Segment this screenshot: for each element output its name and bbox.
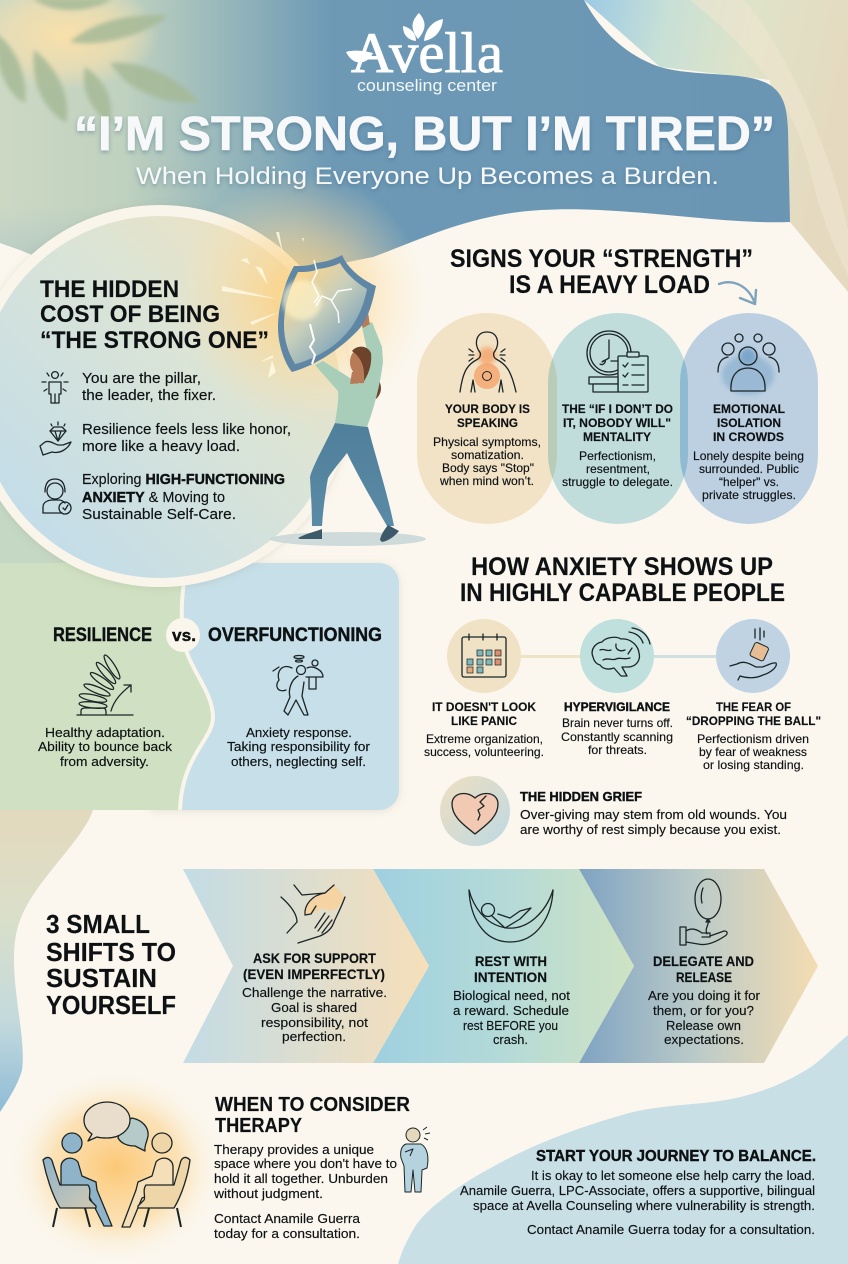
decoration: sage corner behind circle bbox=[0, 495, 110, 563]
text: support description: Goal is shared bbox=[271, 1000, 357, 1015]
bullet: high-functioning anxiety: ANXIETY & Moving to bbox=[82, 490, 225, 506]
heading: overfunctioning: OVERFUNCTIONING bbox=[208, 625, 382, 646]
light burst rays bbox=[222, 232, 304, 378]
icon: clock and checklist bbox=[587, 331, 648, 392]
connector lines bbox=[521, 655, 716, 658]
text: isolation description bbox=[693, 449, 804, 502]
text: delegate description: Are you doing it for bbox=[648, 988, 761, 1003]
text: rest description: a reward. Schedule bbox=[453, 1003, 569, 1018]
icon: brain with signal bbox=[580, 619, 654, 693]
text: panic heading bbox=[432, 700, 536, 728]
heading: 3 small shifts: 3 SMALL bbox=[46, 909, 150, 939]
text: therapy heading: THERAPY bbox=[215, 1115, 303, 1137]
speech bubble: back bbox=[118, 1118, 148, 1151]
panel: start your journey bbox=[460, 1148, 816, 1237]
circle ring bbox=[0, 205, 351, 587]
icon: helping handshake bbox=[281, 885, 345, 943]
bullet: high-functioning anxiety: Exploring HIGH-FUNCTIONING bbox=[82, 472, 285, 488]
legs bbox=[310, 423, 394, 526]
text: grief description: Over-giving may stem from old wounds. You bbox=[520, 807, 787, 822]
speech bubble: front bbox=[84, 1102, 130, 1141]
bullet: resilience bbox=[82, 422, 291, 455]
text: dropping the ball heading: THE FEAR OF bbox=[716, 700, 791, 714]
icon: calendar bbox=[447, 619, 521, 693]
shield cracks bbox=[310, 260, 352, 364]
text: grief heading: THE HIDDEN GRIEF bbox=[520, 789, 642, 804]
text: overfunctioning description: Anxiety response. bbox=[246, 726, 352, 740]
text: therapy contact: today for a consultation. bbox=[214, 1226, 360, 1241]
text: delegate description: Release own bbox=[666, 1018, 741, 1033]
text: rest heading bbox=[474, 954, 547, 985]
text: isolation heading: EMOTIONAL bbox=[713, 402, 785, 416]
item: hidden grief bbox=[440, 776, 787, 846]
text: journey description: Anamile Guerra, LPC-Associate, offers a supportive, bilingual bbox=[460, 1183, 815, 1198]
decoration: left curtain bbox=[0, 810, 93, 1112]
heading: 3 small shifts: YOURSELF bbox=[46, 990, 176, 1020]
hair back bbox=[371, 372, 381, 399]
heading: “THE STRONG ONE” bbox=[40, 327, 269, 354]
text: dropping the ball description: or losing standing. bbox=[703, 758, 804, 772]
text: delegate description: expectations. bbox=[664, 1032, 744, 1047]
bullet: pillar: the leader, the fixer. bbox=[82, 388, 216, 404]
text: therapy description bbox=[213, 1142, 397, 1201]
text: panic heading: IT DOESN'T LOOK bbox=[432, 700, 536, 714]
text: body description: somatization. bbox=[451, 448, 524, 462]
text: mentality description: Perfectionism, bbox=[579, 449, 656, 463]
icon: hand with diamond bbox=[40, 422, 71, 455]
icon: person with headset and badge bbox=[43, 479, 71, 514]
heading: resilience: RESILIENCE bbox=[53, 625, 152, 646]
hand and neck bbox=[350, 308, 370, 384]
heading: how anxiety shows up: HOW ANXIETY SHOWS UP bbox=[471, 553, 773, 581]
decoration: warm light behind leaves bbox=[0, 0, 160, 90]
text: hypervigilance description: for threats. bbox=[588, 743, 647, 757]
text: mentality description: struggle to delegate. bbox=[562, 475, 673, 489]
icon: hand and falling block bbox=[716, 619, 790, 693]
heading: 3 small shifts: SUSTAIN bbox=[46, 963, 157, 993]
text: resilience description bbox=[38, 726, 173, 769]
icon: spring with arrow bbox=[77, 653, 133, 715]
heading: signs: IS A HEAVY LOAD bbox=[509, 271, 710, 299]
text: panic heading: LIKE PANIC bbox=[451, 714, 517, 728]
text: mentality heading: IT, NOBODY WILL" bbox=[563, 416, 671, 430]
torso and arms bbox=[315, 322, 383, 427]
text: delegate description bbox=[648, 988, 761, 1047]
text: journey description bbox=[460, 1168, 815, 1213]
shield bbox=[278, 255, 376, 372]
text: isolation description: private struggles. bbox=[702, 488, 796, 502]
text: dropping the ball description: by fear of weakness bbox=[699, 745, 807, 759]
text: overfunctioning description: Taking responsibility for bbox=[227, 740, 370, 754]
icon: person in hammock bbox=[469, 890, 553, 942]
text: hypervigilance description: Brain never turns off. bbox=[562, 716, 673, 730]
text: dropping the ball description: Perfectionism driven bbox=[697, 732, 809, 746]
bullet: resilience: Resilience feels less like honor, bbox=[82, 422, 291, 438]
icon: person overloaded bbox=[273, 656, 323, 715]
warm glow bbox=[11, 1072, 221, 1262]
bullet: pillar bbox=[82, 371, 216, 404]
icon: hand releasing balloon bbox=[680, 879, 727, 945]
text: support heading: ASK FOR SUPPORT bbox=[253, 951, 377, 966]
text: overfunctioning description bbox=[227, 726, 370, 769]
text: hypervigilance description bbox=[561, 716, 673, 757]
text: body description: Body says "Stop" bbox=[442, 461, 534, 475]
text: rest heading: INTENTION bbox=[474, 970, 547, 985]
item: panic bbox=[424, 619, 544, 759]
text: body description: Physical symptoms, bbox=[433, 435, 541, 449]
panel: shifts chevrons bbox=[183, 869, 818, 1063]
text: rest description: crash. bbox=[493, 1032, 528, 1047]
shift 2: rest bbox=[373, 869, 634, 1063]
title: “I’M STRONG, BUT I’M TIRED” bbox=[74, 108, 775, 161]
decoration: top right curtain bbox=[584, 0, 848, 292]
item: dropping the ball bbox=[686, 619, 821, 772]
text: body heading: SPEAKING bbox=[457, 416, 518, 430]
text: delegate heading: DELEGATE AND bbox=[653, 954, 754, 969]
shift 3: delegate bbox=[579, 869, 818, 1063]
logo tagline: counseling center bbox=[357, 76, 497, 95]
text: rest description: rest BEFORE you bbox=[463, 1018, 558, 1033]
text: rest heading: REST WITH bbox=[475, 954, 547, 969]
text: delegate heading bbox=[653, 954, 754, 985]
text: mentality heading: MENTALITY bbox=[583, 430, 651, 444]
head bbox=[350, 350, 366, 374]
text: mentality heading: THE “IF I DON’T DO bbox=[562, 402, 673, 416]
text: isolation description: Lonely despite being bbox=[693, 449, 804, 463]
icon: logo leaves bbox=[346, 13, 443, 63]
right person and chair bbox=[122, 1133, 190, 1227]
text: panic description: Extreme organization, bbox=[426, 732, 543, 746]
text: isolation heading: ISOLATION bbox=[717, 416, 781, 430]
text: hypervigilance description: Constantly scanning bbox=[561, 730, 673, 744]
heading bbox=[40, 276, 269, 354]
resilience background bbox=[0, 563, 213, 810]
text: therapy heading bbox=[215, 1094, 411, 1137]
text: mentality heading bbox=[562, 402, 673, 444]
text: resilience description: Healthy adaptation. bbox=[45, 726, 165, 740]
heading: 3 small shifts: SHIFTS TO bbox=[46, 937, 176, 967]
text: overfunctioning description: others, neglecting self. bbox=[231, 755, 366, 769]
text: therapy description: hold it all together. Unburden bbox=[214, 1171, 388, 1186]
heading: COST OF BEING bbox=[40, 301, 220, 328]
logo bbox=[346, 13, 503, 95]
text: delegate description: them, or for you? bbox=[653, 1003, 754, 1018]
text: body description: when mind won’t. bbox=[439, 474, 534, 488]
panel: hidden cost circle bbox=[0, 173, 425, 587]
text: therapy contact bbox=[214, 1211, 361, 1241]
text: body description bbox=[433, 435, 541, 488]
text: mentality description: resentment, bbox=[586, 462, 650, 476]
heading: THE HIDDEN bbox=[40, 276, 179, 303]
text: body heading bbox=[445, 402, 530, 430]
text: dropping the ball heading: “DROPPING THE BALL" bbox=[686, 714, 821, 728]
text: body heading: YOUR BODY IS bbox=[445, 402, 530, 416]
vs badge bbox=[166, 618, 200, 652]
text: isolation heading bbox=[713, 402, 785, 444]
text: journey description: It is okay to let someone else help carry the load. bbox=[531, 1168, 815, 1183]
text: dropping the ball heading bbox=[686, 700, 821, 728]
text: grief description: are worthy of rest simply because you exist. bbox=[520, 822, 781, 837]
header background bbox=[0, 0, 790, 300]
decoration: bottom right shape bbox=[398, 1035, 848, 1264]
panel: when to consider therapy bbox=[11, 1072, 430, 1262]
text: therapy heading: WHEN TO CONSIDER bbox=[215, 1094, 411, 1116]
icon: standing person with hand on chest bbox=[401, 1127, 430, 1192]
text: hypervigilance heading: HYPERVIGILANCE bbox=[564, 700, 670, 714]
text: panic description bbox=[424, 732, 544, 759]
shift 1: ask for support bbox=[183, 869, 429, 1063]
overfunctioning background bbox=[150, 563, 399, 810]
text: therapy description: without judgment. bbox=[213, 1186, 323, 1201]
light glow behind shield bbox=[175, 173, 425, 423]
feet bbox=[298, 525, 399, 542]
hair bbox=[352, 347, 371, 381]
panel: resilience vs overfunctioning bbox=[0, 563, 399, 810]
icon: cracked heart bbox=[440, 776, 510, 846]
icon: body with pain points bbox=[460, 332, 516, 392]
bullet: resilience: more like a heavy load. bbox=[82, 439, 240, 455]
pill 3: isolation bbox=[680, 313, 818, 524]
item: hypervigilance bbox=[561, 619, 673, 757]
pill 2: mentality bbox=[548, 313, 688, 524]
text: support description: Challenge the narrative. bbox=[242, 985, 387, 1000]
heading: 3 small shifts bbox=[46, 909, 176, 1020]
text: isolation description: surrounded. Public bbox=[699, 462, 799, 476]
text: delegate heading: RELEASE bbox=[676, 970, 732, 985]
text: therapy description: space where you don't have to bbox=[214, 1156, 397, 1171]
text: support heading bbox=[243, 951, 385, 982]
text: support heading: (EVEN IMPERFECTLY) bbox=[243, 967, 385, 982]
divider bbox=[180, 563, 213, 810]
ground shadow bbox=[270, 532, 426, 546]
circle fill bbox=[0, 216, 341, 578]
pill 1: body bbox=[417, 313, 557, 524]
heading: signs: SIGNS YOUR “STRENGTH” bbox=[450, 245, 753, 273]
text: isolation description: “helper" vs. bbox=[719, 475, 779, 489]
text: rest description: Biological need, not bbox=[453, 988, 570, 1003]
heading: signs bbox=[450, 245, 753, 299]
text: grief description bbox=[520, 807, 787, 837]
text: journey contact: Contact Anamile Guerra today for a consultation. bbox=[527, 1222, 815, 1237]
text: mentality description bbox=[562, 449, 673, 489]
text: support description: responsibility, not bbox=[261, 1015, 368, 1030]
text: journey description: space at Avella Counseling where vulnerability is strength. bbox=[473, 1198, 815, 1213]
vs badge: vs. bbox=[172, 626, 196, 645]
logo wordmark: Avella bbox=[351, 22, 503, 85]
text: support description: perfection. bbox=[282, 1029, 346, 1044]
text: resilience description: from adversity. bbox=[60, 755, 149, 769]
icon: person alone in a crowd bbox=[718, 334, 779, 395]
subtitle: When Holding Everyone Up Becomes a Burden. bbox=[136, 163, 719, 190]
heading: how anxiety shows up bbox=[460, 553, 785, 607]
bullet: high-functioning anxiety bbox=[82, 472, 285, 523]
panel: how anxiety shows up bbox=[424, 619, 821, 846]
text: therapy description: Therapy provides a unique bbox=[214, 1142, 374, 1157]
text: dropping the ball description bbox=[697, 732, 809, 772]
text: support description bbox=[242, 985, 387, 1044]
panel: signs pills bbox=[417, 313, 818, 524]
left person and chair bbox=[43, 1133, 112, 1227]
text: isolation heading: IN CROWDS bbox=[713, 430, 784, 444]
decoration: blurred leaves bbox=[0, 0, 200, 123]
icon: therapy conversation bbox=[11, 1072, 221, 1262]
icon: pillar person bbox=[42, 372, 68, 403]
text: therapy contact: Contact Anamile Guerra bbox=[214, 1211, 361, 1226]
text: journey heading: START YOUR JOURNEY TO BALANCE. bbox=[536, 1148, 816, 1165]
text: panic description: success, volunteering. bbox=[424, 745, 544, 759]
text: rest description bbox=[453, 988, 570, 1047]
arrow: signs heading to pills bbox=[719, 282, 756, 304]
bullet: high-functioning anxiety: Sustainable Self-Care. bbox=[82, 507, 236, 523]
illustration: woman holding cracked shield bbox=[222, 232, 426, 546]
bullet: pillar: You are the pillar, bbox=[82, 371, 201, 387]
heading: how anxiety shows up: IN HIGHLY CAPABLE PEOPLE bbox=[460, 579, 785, 607]
text: resilience description: Ability to bounce back bbox=[38, 740, 173, 754]
